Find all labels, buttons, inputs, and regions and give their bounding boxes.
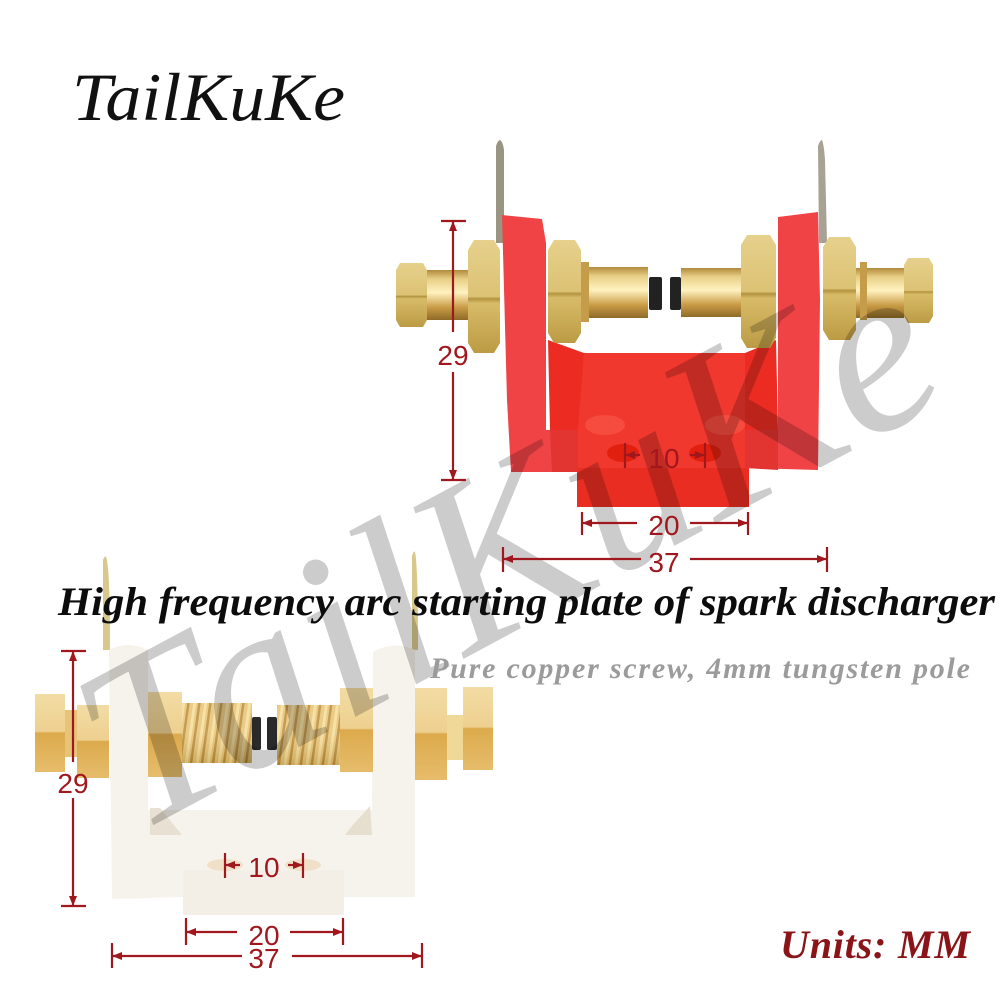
dimension 20 tab width xyxy=(582,510,748,541)
dimension 20 tab width: 20 xyxy=(648,510,680,541)
red device brass bolts xyxy=(396,235,933,353)
dimension 37 overall width xyxy=(503,547,827,578)
subheading: Pure copper screw, 4mm tungsten pole xyxy=(429,652,970,685)
white device mounting tabs xyxy=(103,552,418,650)
dimension 37 overall width: 37 xyxy=(248,943,280,974)
brand name: TailKuKe xyxy=(72,59,345,135)
dimension 29 height: 29 xyxy=(437,340,469,371)
dimension 29 height: 29 xyxy=(57,768,89,799)
dimension 10 hole spacing xyxy=(625,443,705,474)
dimensions: white device xyxy=(57,651,422,974)
dimension 10 hole spacing: 10 xyxy=(648,443,680,474)
dimension 37 overall width: 37 xyxy=(648,547,680,578)
dimension 20 tab width xyxy=(186,918,343,951)
dimension 10 hole spacing: 10 xyxy=(248,852,280,883)
dimensions: red device xyxy=(437,221,827,578)
red spark gap device xyxy=(396,140,933,507)
units note: Units: MM xyxy=(780,922,971,967)
watermark: TailKuKe: TailKuKe xyxy=(34,207,979,881)
dimension 10 hole spacing xyxy=(225,852,303,883)
white spark gap device xyxy=(35,552,493,915)
dimension 29 height xyxy=(57,651,89,906)
dimension 29 height xyxy=(437,221,469,480)
heading: High frequency arc starting plate of spark discharger xyxy=(57,579,995,624)
red device mounting tabs xyxy=(496,140,827,243)
white device inner brass nuts xyxy=(148,688,373,777)
red insulator bracket xyxy=(502,212,820,507)
dimension 20 tab width: 20 xyxy=(248,920,280,951)
white device brass bolts xyxy=(35,687,493,780)
white insulator bracket xyxy=(109,645,415,915)
dimension 37 overall width xyxy=(112,943,422,974)
